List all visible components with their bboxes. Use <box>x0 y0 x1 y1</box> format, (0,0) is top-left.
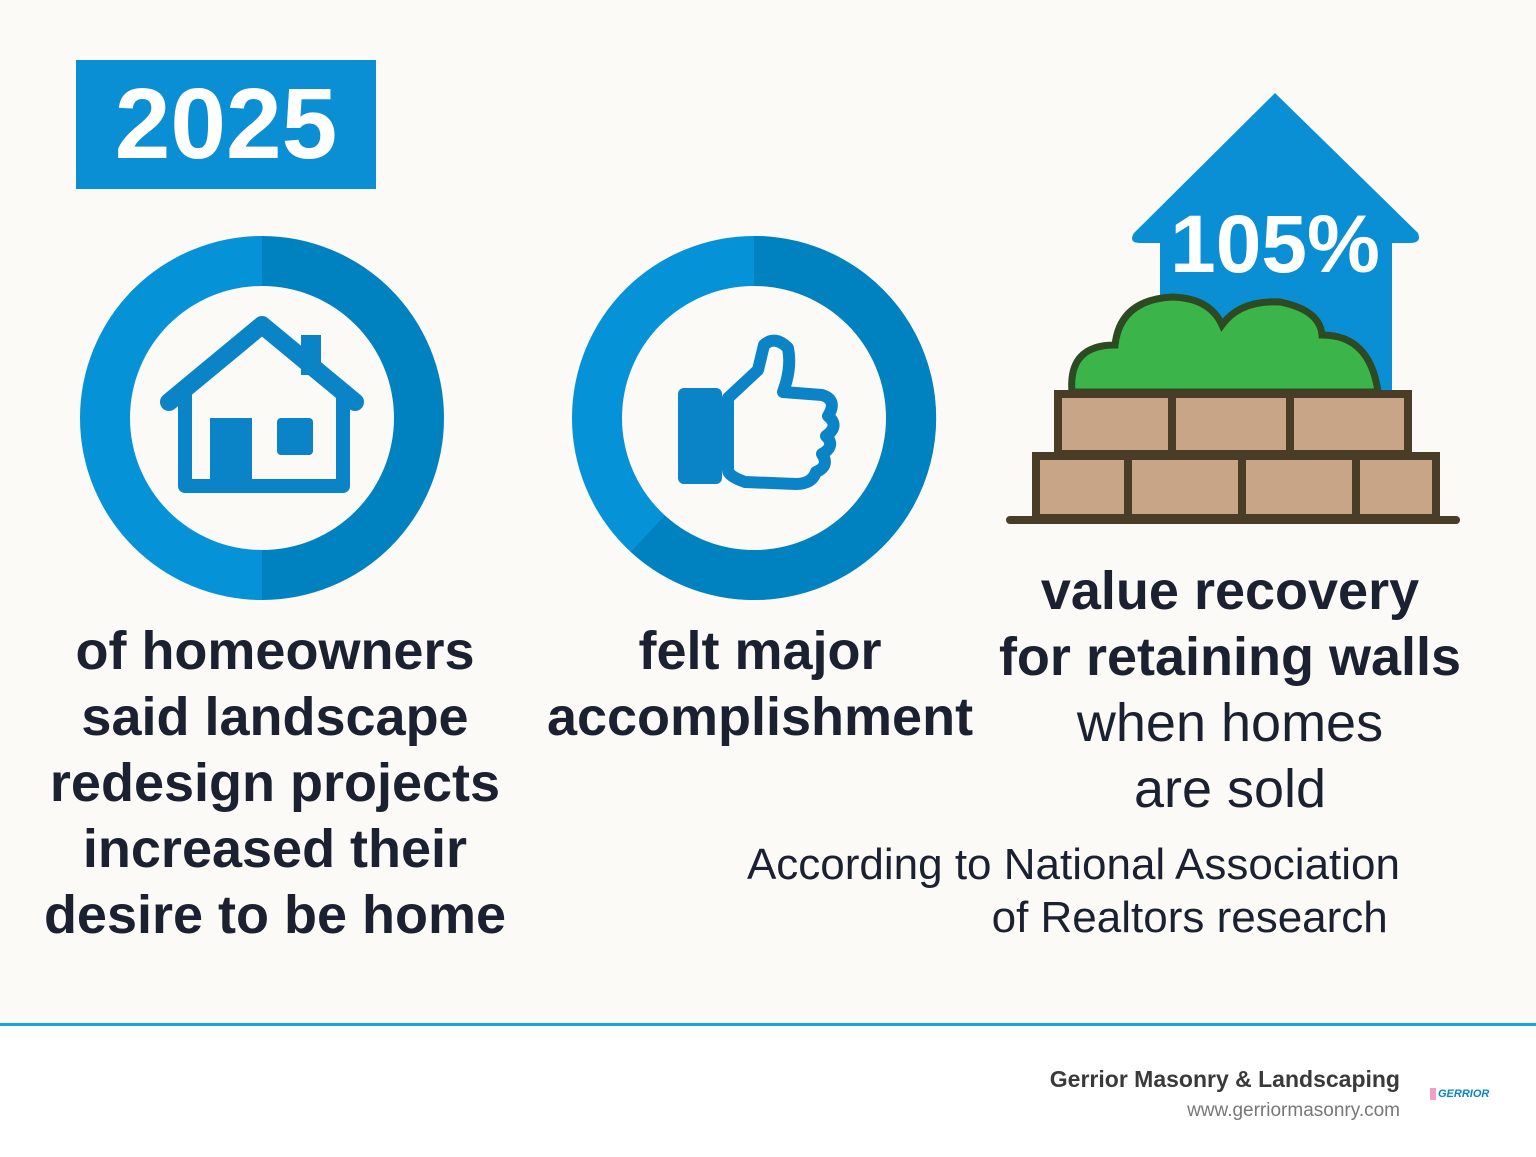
source note: According to National Association <box>747 840 1400 889</box>
text: homeowners: redesign projects <box>50 753 500 813</box>
text: value recovery: when homes <box>1077 693 1383 753</box>
footer <box>0 1023 1536 1157</box>
text: homeowners: increased their <box>83 819 467 879</box>
text: homeowners <box>44 621 506 945</box>
footer company: Gerrior Masonry & Landscaping <box>1050 1066 1400 1092</box>
source note: of Realtors research <box>992 893 1388 942</box>
stat 105%: 105% <box>1170 199 1380 290</box>
source note <box>747 840 1400 942</box>
text: homeowners: of homeowners <box>75 621 475 681</box>
text: value recovery: value recovery <box>1041 561 1419 621</box>
text: accomplishment: accomplishment <box>547 687 973 747</box>
text: accomplishment: felt major <box>638 621 882 681</box>
logo: GERRIOR <box>1438 1088 1489 1100</box>
year badge: 2025 <box>115 68 337 180</box>
text: homeowners: said landscape <box>81 687 469 747</box>
text: accomplishment <box>547 621 973 747</box>
text: value recovery: for retaining walls <box>999 627 1461 687</box>
text: value recovery: are sold <box>1134 759 1326 819</box>
year badge <box>76 60 376 189</box>
footer url: www.gerriormasonry.com <box>1187 1100 1400 1121</box>
text: value recovery <box>999 561 1461 819</box>
text: homeowners: desire to be home <box>44 885 506 945</box>
